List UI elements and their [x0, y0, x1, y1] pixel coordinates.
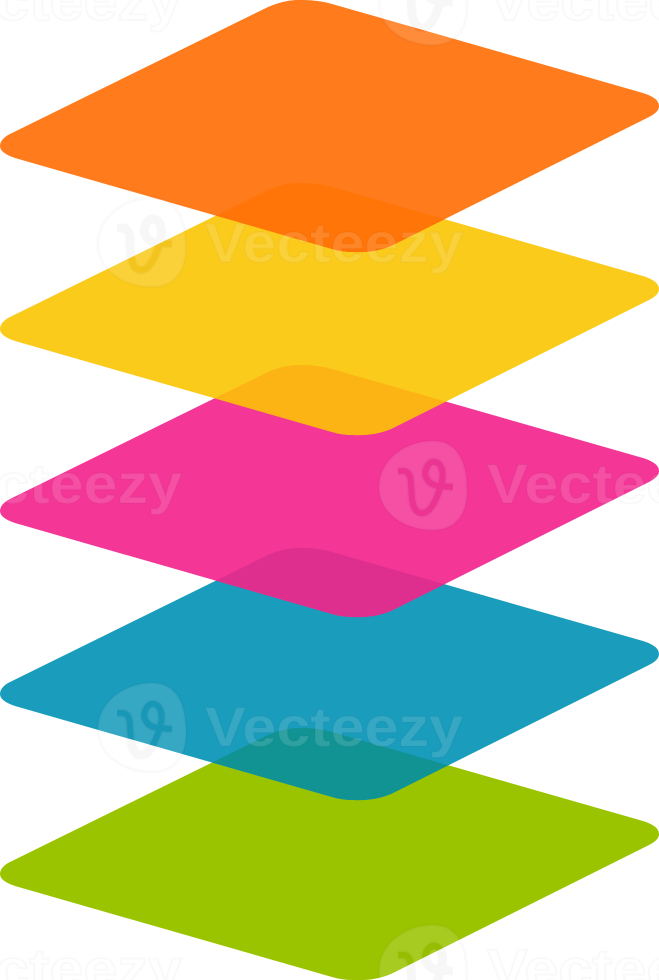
overlap: blue over green	[212, 728, 448, 800]
layer 2: yellow sheet	[0, 183, 659, 435]
watermark row 4	[98, 683, 463, 772]
layer 1: orange sheet	[0, 0, 659, 252]
layer 5: green sheet	[0, 728, 659, 980]
watermark row 1	[0, 0, 659, 45]
overlap: pink over blue	[216, 548, 445, 618]
watermark row 2	[98, 198, 463, 287]
layer 3: pink sheet	[0, 365, 659, 617]
overlap: orange over yellow	[216, 183, 445, 252]
watermark row 2: Vecteezy	[205, 211, 463, 274]
overlap: yellow over pink	[214, 365, 446, 436]
watermark row 5	[0, 925, 659, 980]
watermark row 4: Vecteezy	[205, 695, 463, 758]
watermark row 3	[0, 441, 659, 530]
layer 4: blue sheet	[0, 548, 659, 800]
